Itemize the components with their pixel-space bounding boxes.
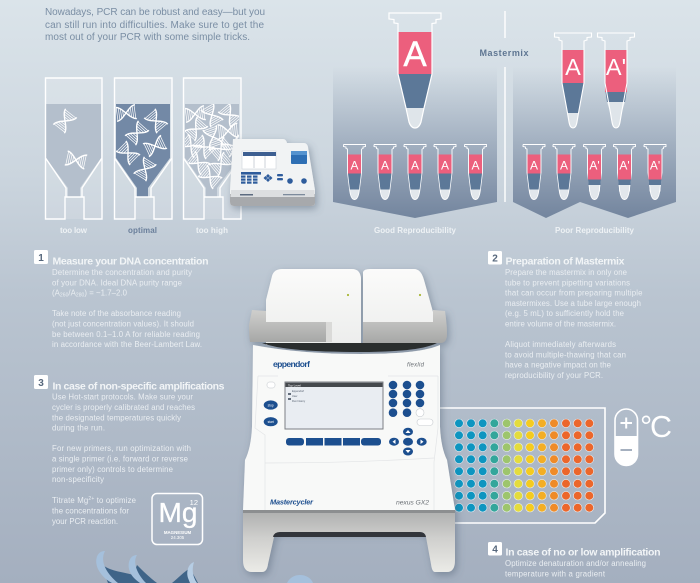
cycler brand text: flexlid <box>407 362 425 368</box>
panel: poor reproducibility background <box>513 66 676 218</box>
body 2: entire volume of the mastermix. <box>505 320 616 328</box>
icon: temperature control: °C <box>640 410 672 444</box>
intro text: Nowadays, PCR can be robust and easy—but you <box>45 7 265 18</box>
body 3: cycler is properly calibrated and reaches <box>52 403 195 412</box>
body 2: to avoid multiple-thawing that can <box>505 350 626 359</box>
badge 3 <box>34 375 48 389</box>
cycler soft keys <box>286 438 381 446</box>
body 2: tube to prevent pipetting variations <box>505 278 630 287</box>
body 3: For new primers, run optimization with <box>52 444 191 453</box>
body 2: have a negative impact on the <box>505 361 611 370</box>
badge 3: 3 <box>38 378 44 389</box>
body 3: Use Hot-start protocols. Make sure your <box>52 392 193 402</box>
body 1: in accordance with the Beer-Lambert Law. <box>52 340 202 349</box>
cycler keypad <box>389 381 433 426</box>
badge 4: 4 <box>492 544 498 556</box>
small tubes: good reproducibility: A <box>350 158 359 172</box>
label: optimal: optimal <box>128 226 157 235</box>
cycler brand text: eppendorf <box>273 359 310 369</box>
body 2: Aliquot immediately afterwards <box>505 340 616 349</box>
funnel: too low <box>46 78 102 219</box>
panel: good reproducibility background <box>333 66 497 218</box>
heading 4: In case of no or low amplification <box>506 546 660 558</box>
label: good reproducibility: Good Reproducibility <box>374 226 457 235</box>
intro text: can still run into difficulties. Make sure to get the <box>45 20 264 31</box>
body 2 <box>505 268 642 380</box>
body 3: 2+ <box>88 496 94 502</box>
cycler screen: Run history <box>292 399 306 403</box>
body 2: reproducibility of your PCR. <box>505 371 603 380</box>
small tubes: poor reproducibility: A' <box>650 158 660 172</box>
funnel: optimal <box>114 78 172 219</box>
label: Mastermix: Mastermix <box>480 48 528 58</box>
body 4 <box>505 559 646 579</box>
body 1: 260 <box>60 293 69 299</box>
icon: magnesium element tile: MAGNESIUM <box>164 530 191 535</box>
icon: spectrophotometer <box>230 139 315 206</box>
body 2: that can occur from preparing multiple <box>505 289 642 298</box>
cycler handle band <box>249 310 447 352</box>
intro text: most out of your PCR with some simple tricks. <box>45 32 250 43</box>
thermal cycler <box>243 269 455 572</box>
section 1: DNA concentration <box>34 250 208 349</box>
panel: DNA concentration funnels <box>46 78 246 235</box>
body 3: your PCR reaction. <box>52 517 118 526</box>
small tubes: poor reproducibility <box>523 144 666 200</box>
heading 2: Preparation of Mastermix <box>506 256 625 268</box>
label: too low: too low <box>60 226 88 235</box>
tube: medium A: A <box>565 54 581 80</box>
bottom DNA helix illustration <box>96 551 313 583</box>
tube: large A: A <box>403 35 427 74</box>
cycler brand text: Mastercycler <box>270 498 314 506</box>
cycler front panel outline <box>255 376 438 510</box>
tube: medium A <box>554 33 592 128</box>
cycler body <box>243 345 455 510</box>
small tubes: poor reproducibility: A' <box>589 158 600 172</box>
small tubes: good reproducibility: A <box>381 158 389 172</box>
small tubes: good reproducibility: A <box>411 158 419 172</box>
icon: magnesium element tile: 12 <box>190 498 198 507</box>
badge 1: 1 <box>38 253 44 264</box>
body 4: temperature with a gradient <box>505 570 606 579</box>
cycler screen <box>284 382 384 430</box>
body 2: mastermixes. Use a tube large enough <box>505 299 641 308</box>
body 3 <box>52 392 195 526</box>
section 2: Preparation of Mastermix <box>488 251 642 380</box>
tube: medium A prime: A' <box>606 54 626 80</box>
cycler stop and start buttons <box>264 382 278 426</box>
body 3: non-specificity <box>52 475 104 484</box>
cycler screen: Eppendorf <box>292 389 304 393</box>
body 3: a single primer (i.e. forward or reverse <box>52 454 188 464</box>
body 1: Take note of the absorbance reading <box>52 309 181 318</box>
small tubes: good reproducibility <box>344 144 486 200</box>
divider <box>504 11 506 202</box>
body 1: /A <box>68 289 77 298</box>
cycler direction pad <box>389 428 427 456</box>
body 1: of your DNA. Ideal DNA purity range <box>52 278 182 287</box>
cycler screen: Top Level <box>288 383 301 387</box>
body 2: Prepare the mastermix in only one <box>505 268 627 277</box>
body 3: Titrate Mg <box>52 496 88 505</box>
small tubes: good reproducibility: A <box>471 158 480 172</box>
label: poor reproducibility: Poor Reproducibility <box>555 226 635 235</box>
body 1: (A <box>52 289 60 298</box>
body 3: to optimize <box>94 496 136 505</box>
body 1 <box>52 268 202 349</box>
funnel: too high <box>182 77 242 220</box>
small tubes: poor reproducibility: A' <box>619 158 630 172</box>
body 1: 280 <box>76 293 85 299</box>
body 1: be between 0.1–1.0 A for reliable reading <box>52 330 200 339</box>
badge 1 <box>34 250 48 264</box>
body 1: ) = ~1.7–2.0 <box>84 289 128 298</box>
section 3: non-specific amplifications <box>34 375 225 526</box>
badge 4 <box>488 542 502 556</box>
body 3: during the run. <box>52 424 105 433</box>
section 4: no or low amplification <box>488 542 660 579</box>
body 4: Optimize denaturation and/or annealing <box>505 559 646 568</box>
cycler foot shadow <box>273 532 426 537</box>
body 2: (e.g. 5 mL) to sufficiently hold the <box>505 309 624 318</box>
body 1: Determine the concentration and purity <box>52 268 192 277</box>
cycler stop and start buttons: start <box>268 420 274 424</box>
icon: magnesium element tile <box>152 494 202 544</box>
body 3: the concentrations for <box>52 506 129 516</box>
badge 2 <box>488 251 502 264</box>
heading 3: In case of non-specific amplifications <box>52 380 225 392</box>
icon: magnesium element tile: 24.305 <box>171 535 185 540</box>
well plate heat map <box>440 408 605 523</box>
tube: medium A prime <box>598 33 634 128</box>
cycler lids <box>266 269 433 345</box>
badge 2: 2 <box>492 254 498 264</box>
cycler brand text <box>270 359 429 506</box>
cycler stop and start buttons: stop <box>268 404 274 408</box>
body 3: the designated temperatures quickly <box>52 413 181 422</box>
intro text <box>45 7 265 43</box>
label: too high: too high <box>196 226 228 235</box>
body 3: primer only) controls to determine <box>52 465 173 474</box>
icon: temperature control <box>615 409 672 466</box>
small tubes: poor reproducibility: A <box>530 158 538 172</box>
tube: large A <box>389 13 441 128</box>
heading 1: Measure your DNA concentration <box>52 256 208 268</box>
small tubes: poor reproducibility: A <box>560 158 568 172</box>
icon: magnesium element tile: Mg <box>158 497 197 528</box>
small tubes: good reproducibility: A <box>441 158 449 172</box>
body 1: (not just concentration values). It should <box>52 320 194 328</box>
cycler base <box>243 510 455 572</box>
cycler screen: User <box>292 394 298 398</box>
cycler brand text: nexus GX2 <box>396 500 429 506</box>
